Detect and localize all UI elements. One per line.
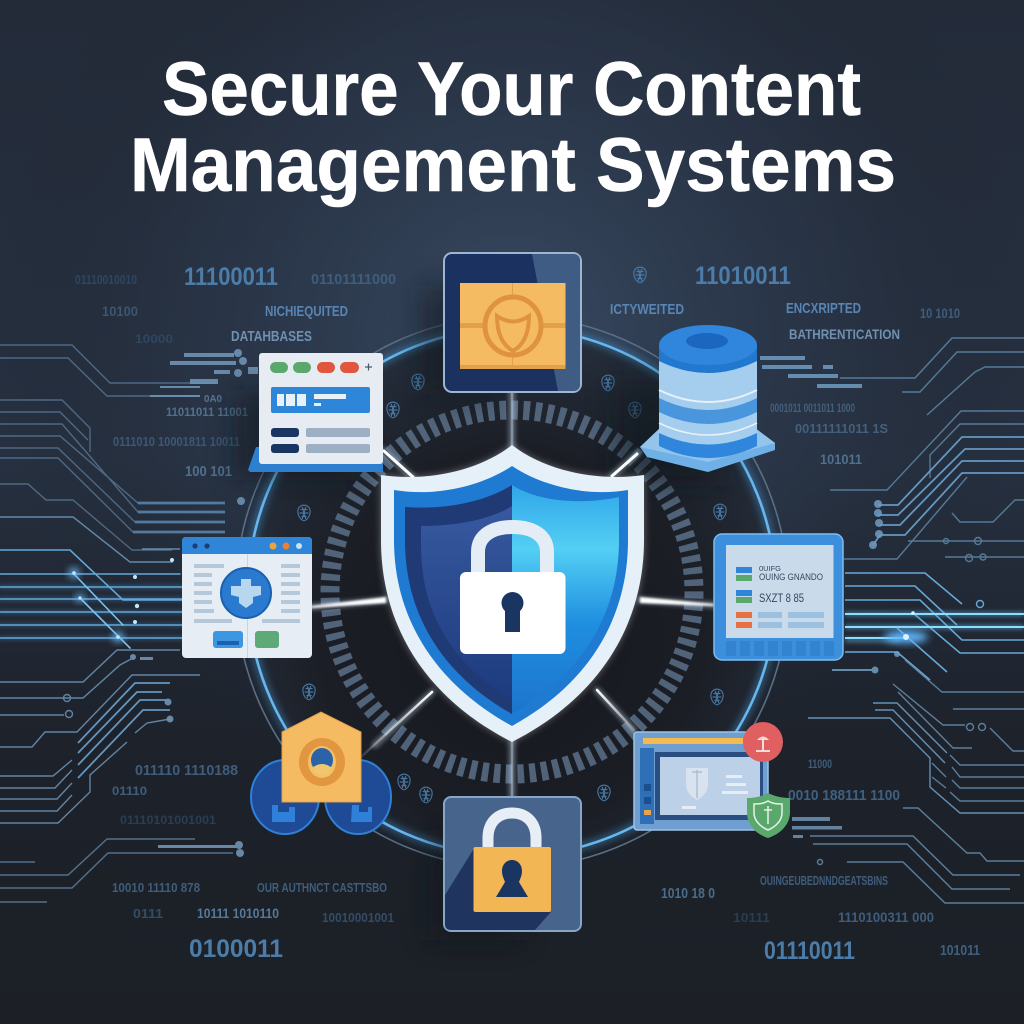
binary and encrypted text fragments: 0001011 0011011 1000: [770, 401, 855, 415]
binary and encrypted text fragments: ENCXRIPTED: [786, 300, 861, 317]
card: bottom padlock: [444, 797, 581, 931]
card: data tablet: 0UIFG: [759, 566, 781, 573]
binary and encrypted text fragments: 11010011: [695, 262, 791, 290]
padlock: [460, 527, 566, 654]
title: [130, 47, 896, 208]
bright traces: left: [0, 550, 182, 648]
circuit traces: left: [0, 345, 258, 902]
binary and encrypted text fragments: 1010 18 0: [661, 885, 715, 902]
circuit traces: right: [760, 338, 1024, 903]
small shield glyphs: [298, 267, 726, 803]
connector beams: [311, 392, 714, 797]
binary and encrypted text fragments: 10 1010: [920, 305, 960, 321]
binary and encrypted text fragments: 10010 11110 878: [112, 880, 200, 895]
binary and encrypted text fragments: [75, 262, 980, 965]
card: orange tag with user circles: [251, 712, 391, 834]
binary and encrypted text fragments: DATAHBASES: [231, 328, 312, 345]
light glints: right: [884, 611, 928, 643]
binary and encrypted text fragments: 10010001001: [322, 910, 394, 925]
binary and encrypted text fragments: 0111010 10001811 10011: [113, 434, 240, 449]
binary and encrypted text fragments: ICTYWEITED: [610, 301, 684, 318]
binary and encrypted text fragments: NICHIEQUITED: [265, 303, 348, 320]
binary and encrypted text fragments: 01110101001001: [120, 813, 216, 827]
binary and encrypted text fragments: 11100011: [184, 263, 278, 291]
binary and encrypted text fragments: 11011011 11001: [166, 405, 248, 419]
binary and encrypted text fragments: 011110 1110188: [135, 762, 238, 779]
binary and encrypted text fragments: OUINGEUBEDNNDGEATSBINS: [760, 873, 888, 888]
binary and encrypted text fragments: 01110: [112, 784, 147, 798]
central shield: [381, 445, 644, 742]
card: data tablet: OUING GNANDO: [759, 572, 823, 582]
binary and encrypted text fragments: 01101111000: [311, 271, 396, 288]
binary and encrypted text fragments: 00111111011 1S: [795, 421, 888, 436]
card: browser with shield: [182, 537, 312, 658]
binary and encrypted text fragments: 101011: [820, 451, 862, 467]
binary and encrypted text fragments: 01110011: [764, 937, 855, 965]
card: dashboard panel: [248, 353, 383, 472]
binary and encrypted text fragments: 101011: [940, 942, 980, 959]
binary and encrypted text fragments: 0111: [133, 906, 163, 921]
binary and encrypted text fragments: 10111 1010110: [197, 905, 279, 921]
card: data tablet: [714, 534, 843, 660]
binary and encrypted text fragments: 0A0: [204, 394, 222, 405]
card: database stack: [640, 325, 775, 472]
binary and encrypted text fragments: 10000: [135, 332, 173, 346]
binary and encrypted text fragments: OUR AUTHNCT CASTTSBO: [257, 880, 387, 895]
card: top chip: [444, 253, 581, 392]
binary and encrypted text fragments: 0010 188111 1100: [788, 787, 900, 804]
binary and encrypted text fragments: 10100: [102, 303, 138, 319]
title: Secure Your Content: [162, 47, 861, 132]
card: browser with badges: [634, 722, 790, 838]
bright traces: right: [845, 573, 1024, 680]
card: data tablet: SXZT 8 85: [759, 591, 804, 605]
binary and encrypted text fragments: BATHRENTICATION: [789, 326, 900, 342]
card shadows: [235, 285, 725, 940]
title: Management Systems: [130, 123, 896, 208]
binary and encrypted text fragments: 10111: [733, 910, 770, 925]
binary and encrypted text fragments: 0100011: [189, 935, 283, 963]
light glints: left: [69, 558, 174, 642]
binary and encrypted text fragments: 100 101: [185, 463, 232, 480]
binary and encrypted text fragments: 01110010010: [75, 272, 137, 287]
security ring: [236, 316, 788, 868]
binary and encrypted text fragments: 1110100311 000: [838, 909, 934, 925]
binary and encrypted text fragments: 11000: [808, 757, 832, 771]
